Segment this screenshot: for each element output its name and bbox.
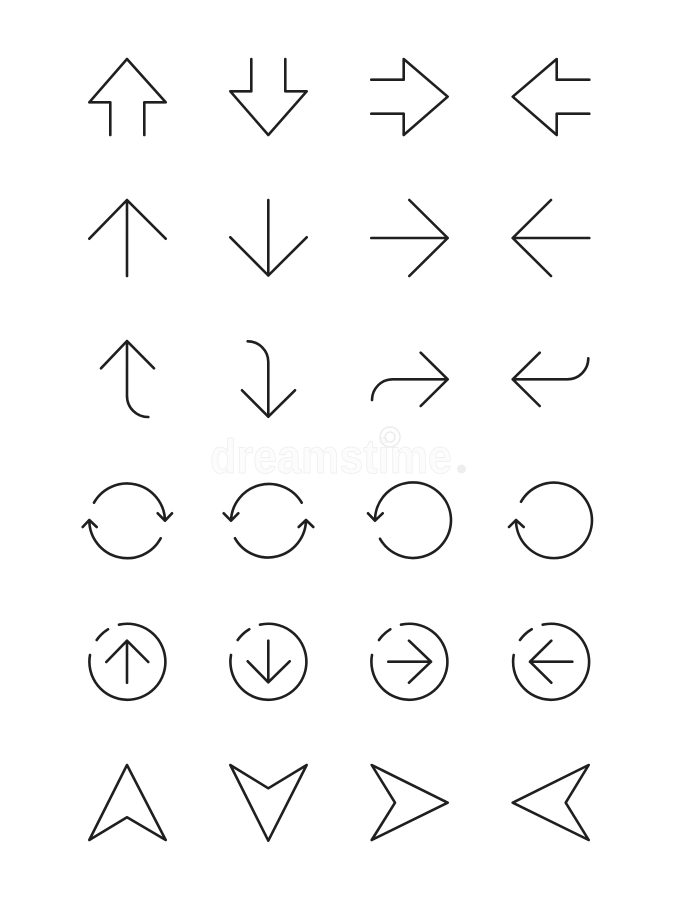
icon: circled arrow up — [89, 624, 165, 700]
icon: thin arrow down — [230, 200, 307, 276]
icon: navigation pointer up — [89, 765, 166, 840]
icon: outlined arrow left — [513, 59, 589, 135]
icon: navigation pointer down — [230, 765, 307, 841]
icon: navigation pointer right — [372, 765, 448, 840]
icon: circled arrow right — [371, 624, 447, 700]
icon: curved arrow down — [242, 341, 295, 417]
icon: single-arrow rotate left — [368, 482, 451, 558]
icon: circled arrow left — [513, 624, 589, 700]
icon: thin arrow right — [371, 200, 448, 276]
icon: outlined arrow down — [230, 59, 307, 135]
icon: outlined arrow right — [371, 59, 448, 135]
icon: circled arrow down — [230, 624, 306, 700]
icon: thin arrow left — [513, 200, 589, 276]
icon: two-arrow refresh counterclockwise — [224, 484, 313, 557]
icon: curved arrow left — [513, 353, 588, 406]
watermark: dreamstime — [210, 431, 452, 484]
icon: single-arrow rotate right — [509, 483, 592, 558]
icon: curved arrow up — [101, 341, 154, 417]
icon: curved arrow right — [372, 353, 448, 406]
icon: navigation pointer left — [513, 765, 589, 840]
icon: thin arrow up — [89, 200, 166, 276]
icon: outlined arrow up — [89, 59, 166, 135]
icon: two-arrow refresh clockwise — [83, 484, 172, 558]
